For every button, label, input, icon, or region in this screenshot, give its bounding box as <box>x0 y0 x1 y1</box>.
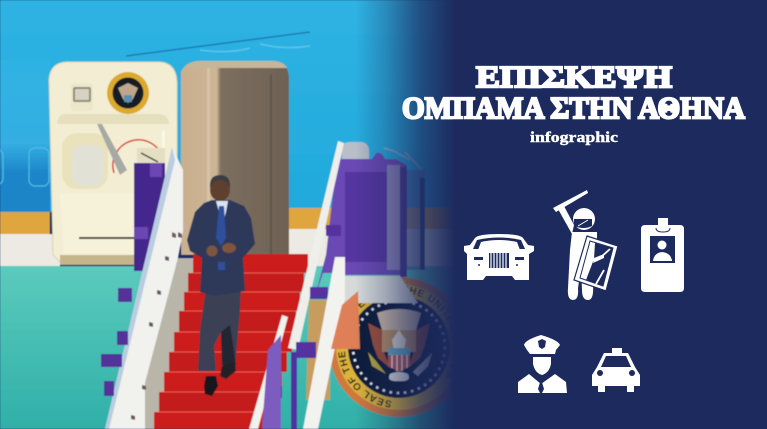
title <box>402 59 746 125</box>
grey stair treads <box>145 258 196 429</box>
suit jacket <box>187 200 255 296</box>
open doorway <box>181 61 289 255</box>
icon: ID badge <box>641 218 684 292</box>
icon: limousine <box>464 234 534 280</box>
purple stair side panel <box>134 163 165 271</box>
title line 1: ΕΠΙΣΚΕΨΗ <box>476 59 672 94</box>
aircraft door panel with seal <box>49 62 177 265</box>
seal ring lettering: SEAL OF THE PRESIDENT OF THE UNITED STATES <box>338 286 446 408</box>
aircraft fuselage <box>0 0 480 429</box>
icon: taxi <box>592 348 640 392</box>
head and hair <box>210 179 230 201</box>
right stair structure and purple panels <box>249 141 425 429</box>
president in a dark suit <box>187 175 255 396</box>
title line 2: ΟΜΠΑΜΑ ΣΤΗΝ ΑΘΗΝΑ <box>402 90 746 125</box>
navy background panel <box>455 0 767 429</box>
presidential seal on fuselage <box>331 276 448 418</box>
subtitle: infographic <box>530 130 618 146</box>
left stair railing <box>101 147 183 429</box>
panel: photo of the president descending the aircraft stairs <box>0 0 450 429</box>
trousers <box>198 286 241 371</box>
icon: police officer <box>518 335 567 393</box>
hands <box>206 246 218 256</box>
red carpet steps <box>154 254 308 429</box>
icon: riot police officer with baton and shield <box>553 190 618 300</box>
navy gradient fade over the photo <box>355 0 455 429</box>
orange panel over seal <box>331 291 360 349</box>
shoes <box>204 376 218 396</box>
